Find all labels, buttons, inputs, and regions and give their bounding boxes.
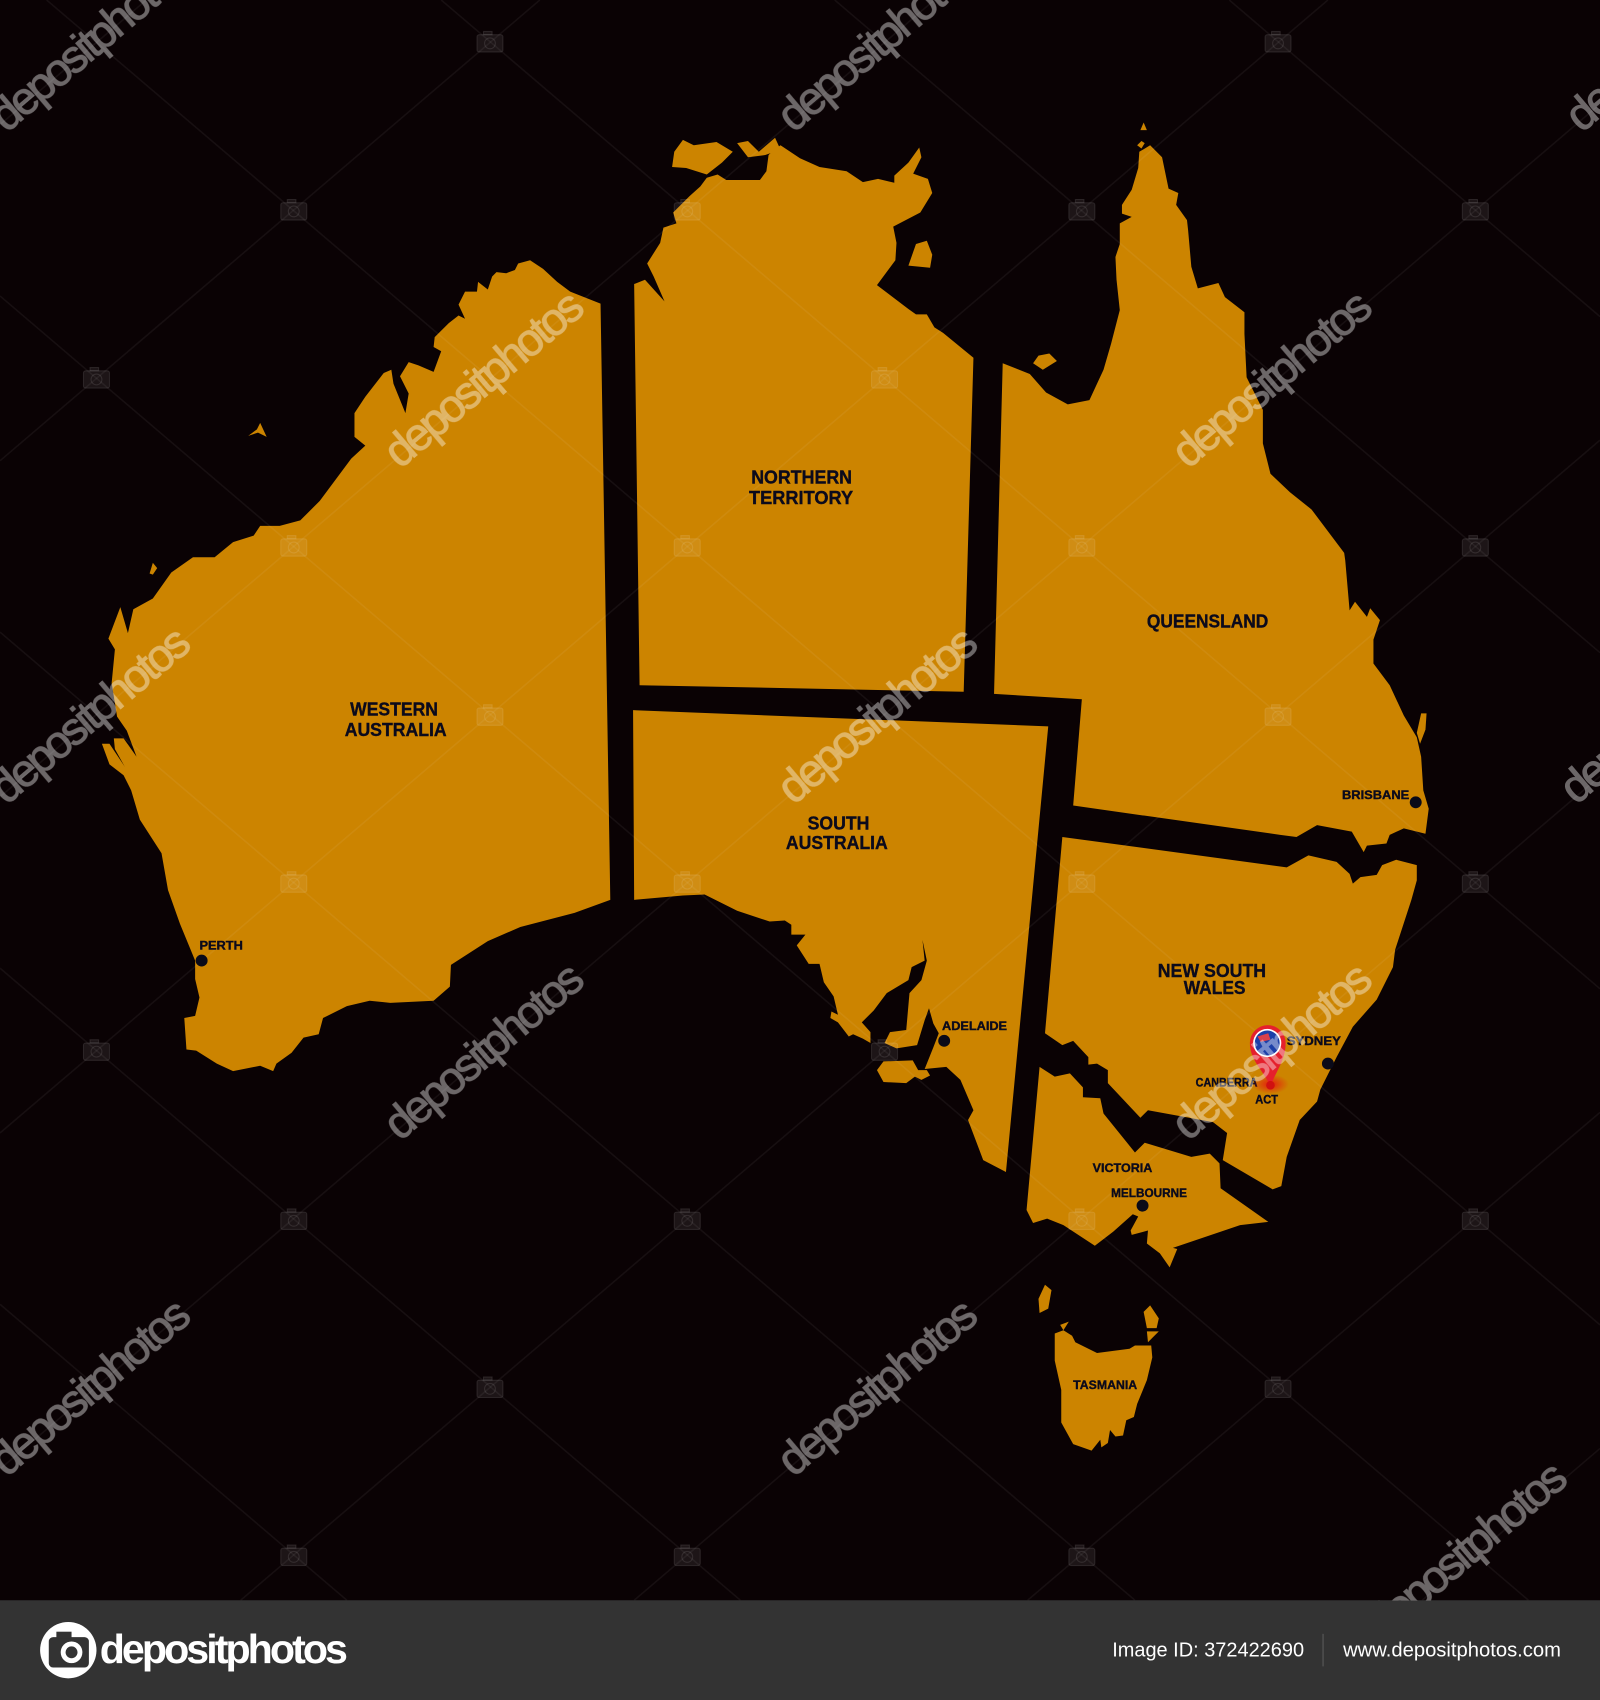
map of Australia [102, 123, 1429, 1451]
image ID: Image ID: 372422690 [1112, 1639, 1304, 1662]
label: Melbourne: MELBOURNE [1111, 1186, 1187, 1200]
panel: South Australia [633, 710, 1048, 1172]
logo wordmark: depositphotos [100, 1626, 348, 1672]
label: Queensland: QUEENSLAND [1147, 611, 1268, 632]
state labels: AUSTRALIA [786, 832, 888, 853]
label: Victoria: VICTORIA [1093, 1161, 1153, 1175]
website URL: www.depositphotos.com [1342, 1639, 1561, 1662]
label: Adelaide: ADELAIDE [942, 1019, 1007, 1033]
label: New South Wales: NEW SOUTH [1158, 960, 1266, 981]
watermarks: depositphotos [767, 616, 987, 813]
panel: Victoria [1027, 1067, 1268, 1267]
icon: depositphotos logo [40, 1622, 96, 1678]
label: Perth: PERTH [199, 939, 243, 953]
label: Sydney: SYDNEY [1287, 1034, 1341, 1048]
watermarks: depositphotos [1357, 1451, 1577, 1648]
state labels: TERRITORY [749, 487, 853, 508]
watermarks: depositphotos [767, 1288, 987, 1485]
panel: New South Wales [1045, 837, 1417, 1189]
state labels [199, 467, 1409, 1392]
city dots [196, 796, 1422, 1212]
label: ACT: ACT [1255, 1093, 1279, 1107]
panel: Queensland [994, 123, 1429, 852]
label: Western Australia: WESTERN [350, 699, 438, 720]
watermarks: depositphotos [1162, 952, 1381, 1149]
state labels: WALES [1184, 977, 1246, 998]
panel: Northern Territory [634, 138, 973, 692]
footer bar [0, 1600, 1600, 1700]
label: Tasmania: TASMANIA [1073, 1378, 1138, 1392]
small islands [150, 423, 267, 575]
state labels: AUSTRALIA [345, 719, 447, 740]
watermarks: depositphotos [373, 952, 593, 1149]
label: Brisbane: BRISBANE [1342, 788, 1409, 802]
icon: map pin with Australian flag globe [1250, 1025, 1289, 1094]
label: South Australia: SOUTH [808, 812, 869, 833]
watermarks: depositphotos [1162, 280, 1381, 477]
label: Northern Territory: NORTHERN [751, 467, 852, 488]
panel: Western Australia [102, 260, 610, 1071]
watermark camera icons [83, 31, 1488, 1566]
divider [1322, 1634, 1324, 1666]
panel: Tasmania [1038, 1285, 1159, 1451]
watermarks: depositphotos [373, 280, 593, 477]
label: Canberra: CANBERRA [1196, 1075, 1258, 1089]
